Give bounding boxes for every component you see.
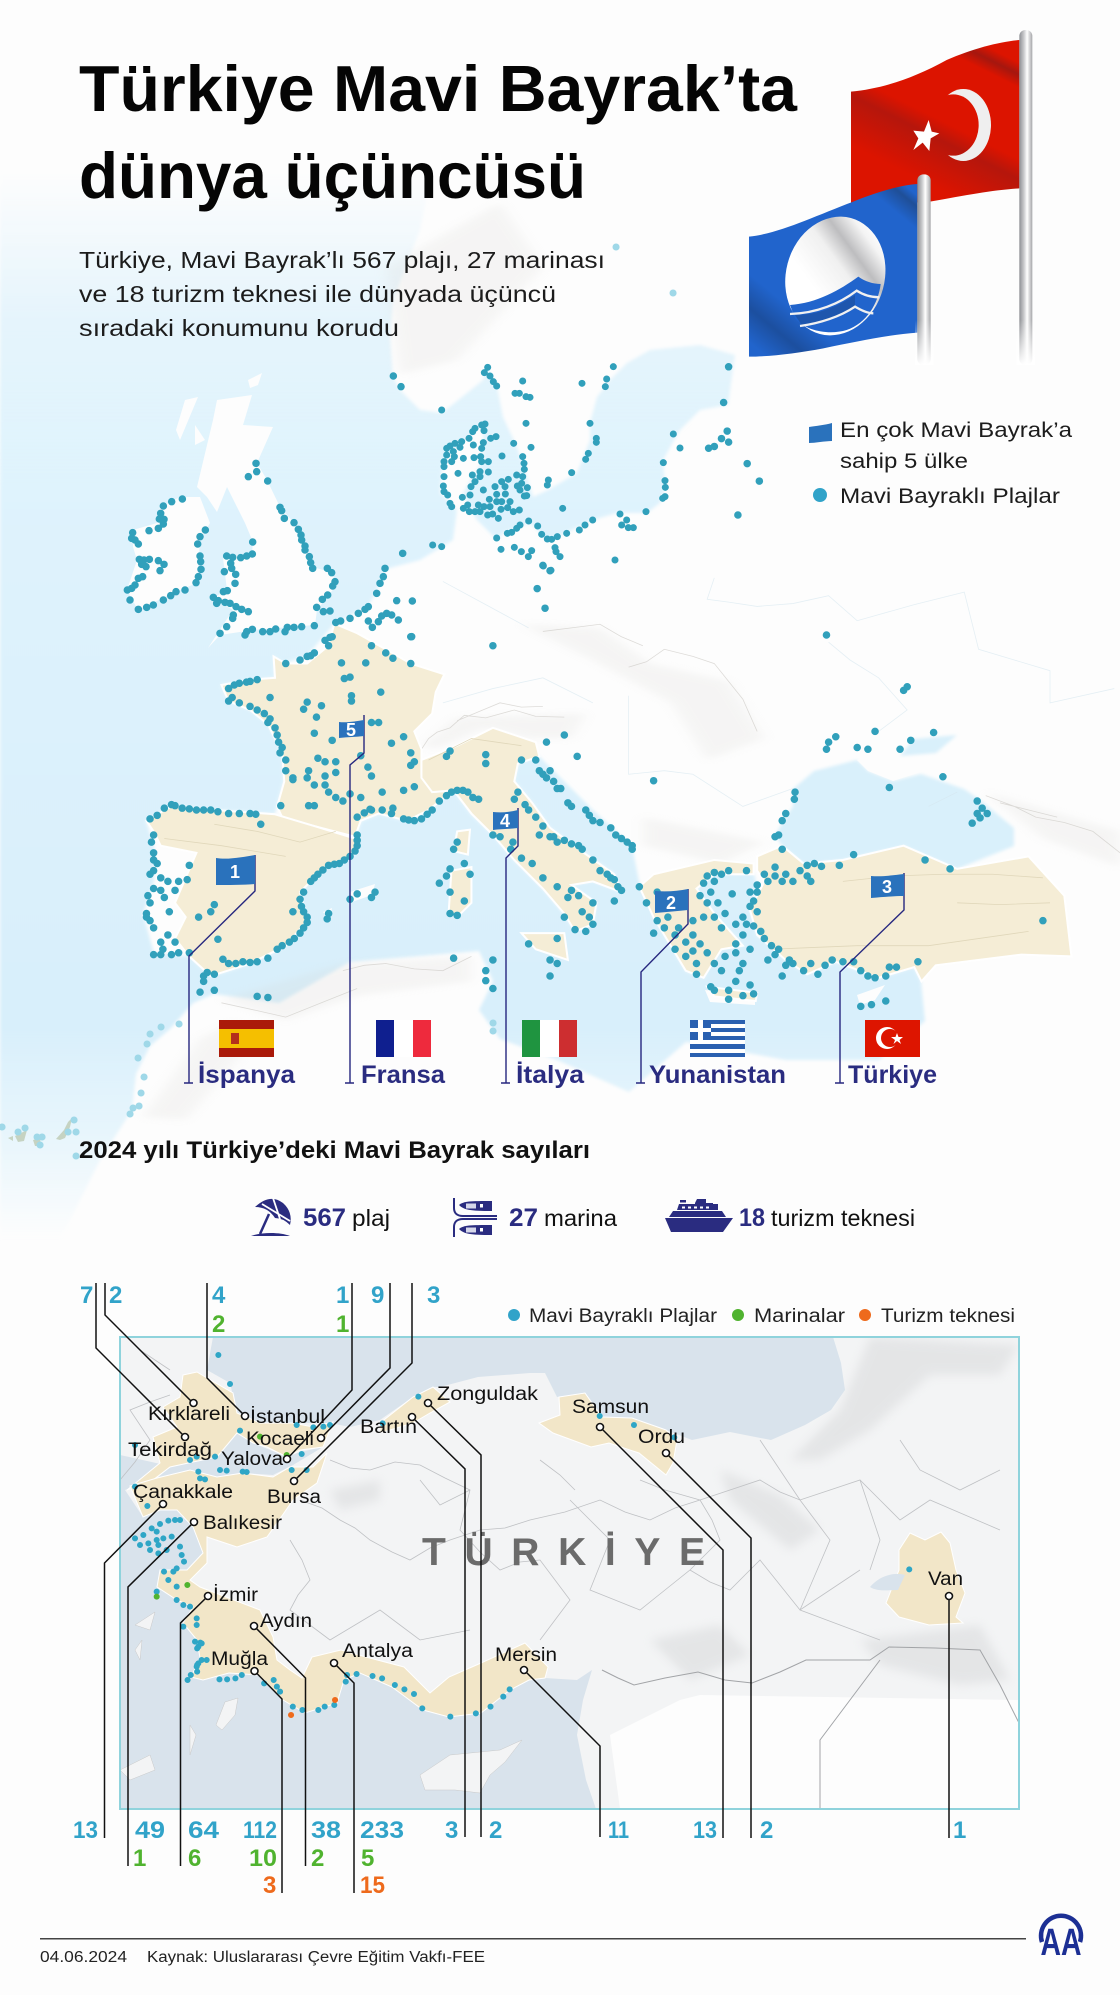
city labels: Aydın <box>260 1611 312 1632</box>
city labels: Ordu <box>638 1427 685 1448</box>
map: highlighted top-5 countries <box>146 624 1071 1001</box>
sea: Crimea land <box>857 752 921 781</box>
beach dots: extra coastal beads <box>146 640 897 985</box>
rank marker: 1 Spain: 1 <box>230 862 240 882</box>
legend: Türkiye map: Mavi Bayraklı Plajlar <box>529 1306 718 1327</box>
leader lines: top <box>96 1283 412 1481</box>
land shading: terrain <box>143 203 1120 1120</box>
terrain on countries <box>164 739 1050 949</box>
beach dots: pale faded dots <box>2 247 673 1156</box>
footer <box>40 1938 1026 1966</box>
sea: Mediterranean <box>211 756 925 1092</box>
province counts: bottom: 2 <box>311 1845 324 1872</box>
stats row <box>251 1198 915 1237</box>
icon: cruise ship <box>665 1199 733 1232</box>
city labels: Kırklareli <box>148 1404 230 1425</box>
city labels: İstanbul <box>250 1407 325 1428</box>
logo: Anadolu Agency <box>1040 1916 1082 1964</box>
subtitle text: sıradaki konumunu korudu <box>79 315 399 341</box>
flag pole: Blue Flag <box>915 174 933 365</box>
province counts: bottom: 64 <box>188 1817 220 1844</box>
rank marker: 3 Türkiye: 3 <box>882 877 892 897</box>
province counts: top: 2 <box>109 1282 122 1309</box>
country flag: Greece <box>690 1020 745 1057</box>
country flag: Italy <box>522 1020 577 1057</box>
legend: Europe map <box>809 419 1072 508</box>
stats row: marina <box>544 1205 617 1231</box>
city labels: Bartın <box>360 1417 417 1438</box>
rank marker: 3 Türkiye <box>835 873 904 1083</box>
province counts: bottom: 11 <box>608 1817 629 1844</box>
city labels: Balıkesir <box>203 1513 283 1534</box>
city labels: Mersin <box>495 1645 557 1666</box>
city labels: Van <box>928 1569 963 1590</box>
rank marker: 4 Italy <box>493 808 518 1083</box>
city labels: Kocaeli <box>246 1429 314 1450</box>
provinces: Marmara and Aegean <box>130 1453 548 1717</box>
provinces: Zonguldak and Bartın <box>380 1387 450 1433</box>
country: Greece <box>639 860 757 1001</box>
subtitle text: Türkiye, Mavi Bayrak’lı 567 plajı, 27 marinası <box>79 247 605 273</box>
province counts: top: 7 <box>80 1282 93 1309</box>
province counts: bottom: 2 <box>760 1817 773 1844</box>
province counts: bottom: 49 <box>135 1817 165 1844</box>
beach dots: Denmark and Baltic <box>433 367 680 570</box>
rank marker: 5 France: 5 <box>346 720 356 740</box>
stats row: 567 <box>303 1204 346 1232</box>
stats row: 18 <box>739 1204 765 1232</box>
province counts: top: 2 <box>212 1311 225 1338</box>
country names: Yunanistan <box>649 1061 786 1089</box>
province counts: bottom: 5 <box>361 1845 374 1872</box>
Syria and Iraq border <box>602 1647 1019 1809</box>
sea: Black Sea and Azov <box>775 735 1014 869</box>
provinces: Thrace <box>127 1372 333 1490</box>
country: France <box>221 624 454 837</box>
land: Great Britain <box>197 395 335 648</box>
icon: flag legend <box>809 423 832 443</box>
subtitle text: ve 18 turizm teknesi ile dünyada üçüncü <box>79 281 556 307</box>
city markers <box>160 1400 952 1674</box>
logo: Anadolu Agency: AA <box>1040 1922 1082 1964</box>
province counts: bottom: 6 <box>188 1845 201 1872</box>
city labels: Yalova <box>221 1449 283 1470</box>
map: Europe base <box>0 130 1120 1240</box>
land: Ireland <box>127 497 210 610</box>
province counts: top: 4 <box>212 1282 226 1309</box>
country names: Fransa <box>361 1061 446 1089</box>
legend: Türkiye map: Marinalar <box>754 1306 846 1327</box>
country names: İtalya <box>516 1061 585 1089</box>
islands <box>120 1612 522 1793</box>
province counts: bottom: 15 <box>360 1872 385 1899</box>
provinces: Van <box>886 1532 965 1625</box>
rank marker: 2 Greece: 2 <box>666 893 676 913</box>
icon: beach umbrella <box>251 1198 291 1236</box>
province counts: top: 1 <box>336 1311 349 1338</box>
sea: Atlantic, North Sea and Baltic <box>0 130 735 1240</box>
province counts: bottom: 112 <box>243 1817 277 1844</box>
country flag: Spain <box>219 1020 274 1057</box>
legend: Europe map: En çok Mavi Bayrak’a <box>840 419 1072 442</box>
country names: İspanya <box>198 1061 296 1089</box>
province counts: bottom: 38 <box>311 1817 341 1844</box>
title <box>79 52 798 212</box>
beach dots: British Isles and Low Countries <box>127 376 412 637</box>
flags: Turkish and Blue Flag <box>749 30 1035 365</box>
land: Canary Islands <box>8 1118 72 1146</box>
stats row: 27 <box>509 1204 538 1232</box>
rank marker: 4 Italy: 4 <box>500 811 510 831</box>
desert south <box>610 1695 1019 1809</box>
flag pole: Turkey <box>1017 30 1035 365</box>
legend: Türkiye map: Turizm teknesi <box>881 1306 1015 1327</box>
province counts: bottom: 1 <box>133 1845 146 1872</box>
icon: beach dot legend <box>813 488 827 502</box>
leader lines: bottom <box>104 1403 949 1893</box>
Lake Van <box>870 1574 905 1590</box>
subtitle text <box>79 247 605 341</box>
country: Italy <box>421 728 621 960</box>
flag: Turkey <box>851 40 1019 207</box>
legend: Europe map: sahip 5 ülke <box>840 450 968 473</box>
provinces: Samsun and Ordu <box>539 1393 677 1475</box>
beach dots: Europe <box>2 247 1043 1156</box>
city labels: Bursa <box>267 1487 321 1508</box>
city labels: Çanakkale <box>133 1482 233 1503</box>
city labels: Tekirdağ <box>128 1440 212 1461</box>
country names <box>198 1061 937 1089</box>
stats row: turizm teknesi <box>771 1205 915 1231</box>
province counts: top: 9 <box>371 1282 384 1309</box>
rank marker: 2 Greece <box>636 889 688 1083</box>
country names: Türkiye <box>848 1061 937 1089</box>
icon: marina boats <box>454 1198 497 1237</box>
heading: 2024 numbers: 2024 yılı Türkiye’deki Mavi Bayrak sayıları <box>79 1137 590 1164</box>
country: Türkiye <box>750 846 1071 981</box>
province counts: bottom: 10 <box>249 1845 277 1872</box>
province counts: bottom <box>73 1817 966 1899</box>
legend: Europe map: Mavi Bayraklı Plajlar <box>840 485 1060 508</box>
country flag: Türkiye <box>865 1020 920 1057</box>
city labels: Zonguldak <box>437 1384 539 1405</box>
map frame <box>120 1337 1019 1809</box>
province counts: bottom: 3 <box>445 1817 458 1844</box>
country flag: France <box>376 1020 431 1057</box>
province counts: top <box>80 1282 440 1338</box>
country: Spain <box>146 806 357 976</box>
rank marker: 5 France <box>339 715 364 1083</box>
sea <box>207 1337 845 1440</box>
title: Türkiye Mavi Bayrak’ta <box>79 52 798 125</box>
flag: Blue Flag <box>749 184 917 357</box>
legend: Türkiye map <box>508 1306 1015 1327</box>
province counts: bottom: 1 <box>953 1817 966 1844</box>
land base <box>120 1337 1019 1809</box>
city labels: Samsun <box>572 1397 649 1418</box>
province counts: top: 3 <box>427 1282 440 1309</box>
land: small islands <box>176 373 885 1005</box>
province counts: bottom: 13 <box>693 1817 717 1844</box>
TÜRKİYE label: TÜRKİYE <box>422 1531 705 1574</box>
footer: Kaynak: Uluslararası Çevre Eğitim Vakfı-FEE <box>147 1949 485 1966</box>
city labels: İzmir <box>213 1585 259 1606</box>
title: dünya üçüncüsü <box>79 139 586 212</box>
terrain shading <box>330 1337 1019 1685</box>
city labels: Muğla <box>211 1649 268 1670</box>
rank marker: 1 Spain <box>184 855 255 1083</box>
province counts: bottom: 3 <box>263 1872 276 1899</box>
city labels: Antalya <box>342 1641 413 1662</box>
footer: 04.06.2024 <box>40 1949 127 1966</box>
province counts: bottom: 13 <box>73 1817 98 1844</box>
province borders <box>120 1350 1000 1640</box>
city labels <box>128 1384 963 1670</box>
province counts: bottom: 2 <box>489 1817 502 1844</box>
map: Türkiye <box>120 1337 1019 1809</box>
province counts: top: 1 <box>336 1282 349 1309</box>
map dots: Turkish beaches, marinas, tour boats <box>135 1355 909 1717</box>
province counts: bottom: 233 <box>360 1817 404 1844</box>
stats row: plaj <box>352 1205 390 1231</box>
